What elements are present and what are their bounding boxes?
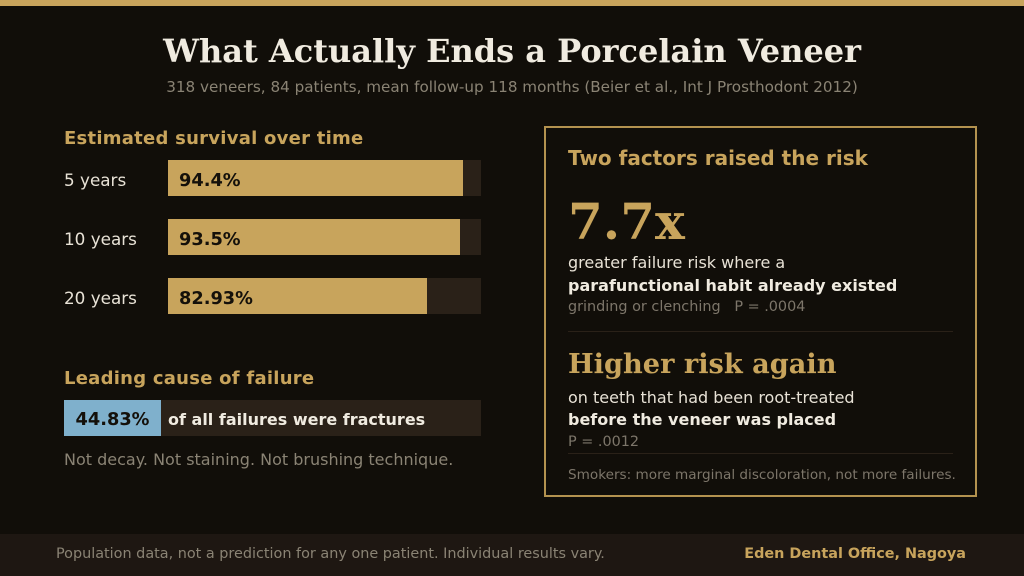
bar fill <box>168 160 463 196</box>
second p-value: P = .0012 <box>568 434 639 450</box>
title: What Actually Ends a Porcelain Veneer <box>163 32 861 70</box>
second heading: Higher risk again <box>568 348 836 380</box>
blue percentage block <box>64 400 161 436</box>
row: 5 years <box>64 160 481 196</box>
stat emphasis: parafunctional habit already existed <box>568 276 897 295</box>
heading: failure: Leading cause of failure <box>64 368 314 389</box>
smokers note: Smokers: more marginal discoloration, not more failures. <box>568 467 956 483</box>
panel: risk factors <box>544 126 977 497</box>
value: 94.4% <box>179 171 241 191</box>
panel: leading cause of failure <box>64 368 481 469</box>
heading: risk: Two factors raised the risk <box>568 146 868 170</box>
second description: on teeth that had been root-treated <box>568 388 855 407</box>
label: 20 years <box>64 288 137 308</box>
bar track <box>168 219 481 255</box>
bar fill <box>168 219 460 255</box>
divider <box>568 453 953 454</box>
stat p-value: grinding or clenching P = .0004 <box>568 299 805 315</box>
disclaimer: Population data, not a prediction for any one patient. Individual results vary. <box>56 546 605 562</box>
value: 82.93% <box>179 289 253 309</box>
value: 93.5% <box>179 230 241 250</box>
stat description: greater failure risk where a <box>568 253 785 272</box>
row: 10 years <box>64 219 481 255</box>
row: 20 years <box>64 278 481 314</box>
bar fill <box>168 278 427 314</box>
subtitle: 318 veneers, 84 patients, mean follow-up 118 months (Beier et al., Int J Prosthodont 2012) <box>166 78 858 96</box>
blue percentage block: 44.83% <box>76 410 149 430</box>
divider <box>568 331 953 332</box>
bar track <box>168 278 481 314</box>
bar track <box>64 400 481 436</box>
top accent bar <box>0 0 1024 6</box>
heading: survival: Estimated survival over time <box>64 128 363 149</box>
second emphasis: before the veneer was placed <box>568 410 836 429</box>
footer <box>0 534 1024 576</box>
note: Not decay. Not staining. Not brushing technique. <box>64 450 453 469</box>
big stat: 7.7x <box>568 192 685 251</box>
practice name: Eden Dental Office, Nagoya <box>744 546 966 562</box>
fracture text: of all failures were fractures <box>168 410 425 429</box>
label: 10 years <box>64 229 137 249</box>
label: 5 years <box>64 170 126 190</box>
panel: survival over time <box>64 128 481 314</box>
bar track <box>168 160 481 196</box>
